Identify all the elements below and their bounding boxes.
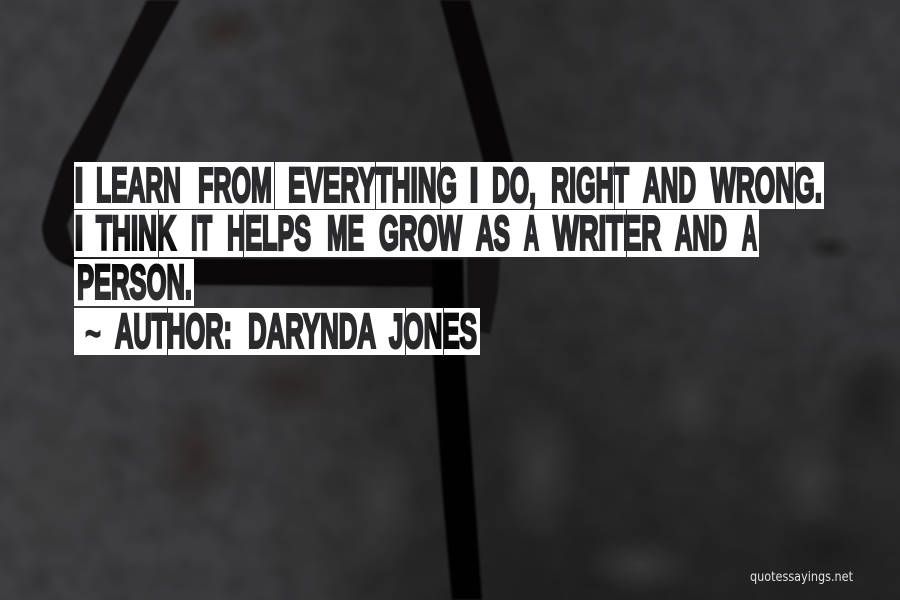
line 4: author [74, 304, 480, 358]
quote box [74, 158, 824, 358]
line 1: AND [643, 158, 696, 212]
line 2: A [524, 206, 539, 260]
line 2: AS [476, 206, 510, 260]
line 3 [74, 256, 194, 310]
line 2: GROW [379, 206, 462, 260]
line 1: I [470, 158, 478, 212]
line 1: RIGHT [551, 158, 629, 212]
line 1: LEARN [96, 158, 181, 212]
line 2: WRITER [553, 206, 661, 260]
line 2: ME [327, 206, 364, 260]
line 2: I [74, 206, 84, 260]
line 2 [74, 206, 759, 260]
line 2: HELPS [227, 206, 311, 260]
line 4: author: JONES [389, 304, 477, 358]
line 4: author: DARYNDA [248, 304, 376, 358]
line 1: EVERYTHING [288, 158, 457, 212]
line 3: PERSON. [77, 256, 192, 310]
line 2: IT [191, 206, 212, 260]
horizontal rod [60, 258, 440, 287]
line 2: THINK [96, 206, 176, 260]
line 4: author: ~ [85, 312, 101, 356]
line 4: author: AUTHOR: [115, 304, 232, 358]
left rod [42, 0, 180, 266]
right rod [440, 0, 513, 200]
watermark: quotessayings.net [750, 570, 853, 585]
line 2: AND [675, 206, 727, 260]
quote box: A [742, 206, 757, 260]
iron triangle rods [42, 0, 513, 600]
line 1: FROM [198, 158, 272, 212]
line 1: DO, [492, 158, 536, 212]
line 1: I [74, 158, 84, 212]
line 1 [74, 158, 824, 214]
centre rod [432, 259, 482, 600]
knot [467, 258, 500, 334]
